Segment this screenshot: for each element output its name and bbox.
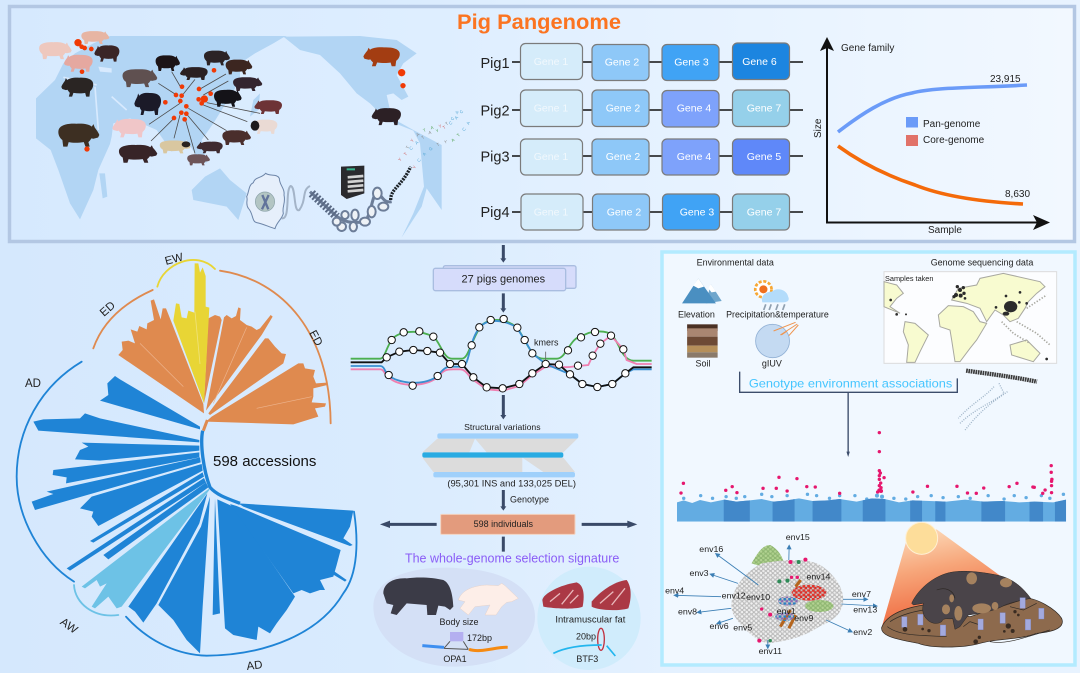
flow arrows <box>380 245 637 552</box>
heading: genotype environment associations: Genotype environment associations <box>749 377 952 391</box>
illustration: pig in mud under sun <box>882 522 1062 647</box>
tree group labels <box>25 251 324 673</box>
tree group labels: ED <box>306 329 324 348</box>
blob: body size <box>373 568 535 667</box>
row: Pig2: Gene 7 <box>747 102 781 114</box>
connector lines <box>149 72 260 153</box>
clade: EW yellow branches <box>173 263 209 403</box>
icon: chromatin fibre <box>310 167 411 231</box>
row: Pig1: Gene 1 <box>534 56 568 68</box>
row: Pig2 <box>480 90 790 127</box>
row: Pig3: Gene 2 <box>606 151 640 163</box>
chart: environment network: env13 <box>853 604 877 614</box>
chart: environment network: env14 <box>806 571 831 581</box>
icon: sun and rain cloud <box>755 281 789 310</box>
tree group labels: EW <box>164 251 185 268</box>
row: Pig3 <box>480 139 790 175</box>
row: Pig4: Gene 2 <box>607 206 641 218</box>
DNA sequence letters: Y C A G T Y A T C A C G <box>412 122 470 168</box>
chart: pan and core genome curves: Gene family <box>841 43 894 54</box>
box: 598 individuals: 598 individuals <box>474 519 534 529</box>
gene presence rows <box>480 43 803 230</box>
panel: pipeline centre <box>351 245 652 670</box>
tree group labels: AD <box>25 378 41 390</box>
row: Pig2: Gene 1 <box>534 102 568 114</box>
pangenome graph with kmers: kmers <box>534 338 559 348</box>
row: Pig2: Gene 4 <box>677 102 711 114</box>
chart: environment network: env11 <box>759 646 782 656</box>
heading: genome sequencing data: Genome sequencing data <box>931 258 1033 268</box>
world map with pig breeds <box>36 31 470 236</box>
structural variations diagram: (95,301 INS and 133,025 DEL) <box>447 479 576 489</box>
chart: environment network: env9 <box>794 613 813 623</box>
sampling location dots <box>74 39 406 152</box>
environmental data: Precipitation&temperature <box>726 310 829 320</box>
chart: environment network: env16 <box>699 544 723 554</box>
environmental data: Elevation <box>678 310 715 320</box>
row: Pig4 <box>480 194 790 230</box>
environmental data: gIUV <box>762 359 782 369</box>
chart: environment network: env5 <box>733 623 752 633</box>
clade: ED orange branches <box>118 299 327 431</box>
chart: pan and core genome curves: 8,630 <box>1005 189 1030 200</box>
icon: sequencer <box>341 166 364 199</box>
structural variations diagram <box>422 422 578 489</box>
tree centre label: 598 accessions <box>213 453 316 470</box>
environmental data: Soil <box>696 359 711 369</box>
pangenome graph with kmers <box>351 315 652 392</box>
legend: Pan-genome <box>923 119 981 130</box>
row: Pig4: Gene 3 <box>680 206 714 218</box>
DNA sequence letters <box>398 110 470 168</box>
box: 27 pigs genomes <box>433 266 576 291</box>
heading: selection signature: The whole-genome selection signature <box>405 551 619 566</box>
row: Pig1: Pig1 <box>480 56 510 72</box>
blob: intramuscular fat: BTF3 <box>576 654 598 664</box>
pig breed illustrations <box>39 31 401 165</box>
tree group labels: AD <box>246 659 263 673</box>
chart: pan and core genome curves: 23,915 <box>990 74 1021 85</box>
chart: environment network: env2 <box>853 627 872 637</box>
chart: environment network: env7 <box>852 589 871 599</box>
chart: pan and core genome curves <box>813 37 1050 236</box>
chart: environment network <box>665 532 877 656</box>
chart: environment network: env8 <box>678 607 697 617</box>
legend <box>906 117 985 146</box>
genome sequencing map: Samples taken <box>885 274 933 283</box>
blob: intramuscular fat: 20bp <box>576 631 596 641</box>
row: Pig1 <box>480 43 790 80</box>
label: Genotype: Genotype <box>510 495 549 505</box>
blob: body size: Body size <box>440 617 478 627</box>
icon: UV globe <box>756 322 798 358</box>
environmental data <box>678 258 829 369</box>
clade: AW light blue branches <box>82 488 209 608</box>
row: Pig3: Gene 1 <box>534 151 568 163</box>
chart: environment network: env4 <box>665 585 684 595</box>
blob: intramuscular fat: Intramuscular fat <box>555 614 626 624</box>
blob: body size: OPA1 <box>443 654 467 664</box>
legend: Core-genome <box>923 135 985 146</box>
chart: environment network: env1 <box>777 606 796 616</box>
row: Pig2: Gene 2 <box>606 102 640 114</box>
chart: environment network: env12 <box>722 591 746 601</box>
panel: pig pangenome top <box>8 4 1076 244</box>
arrows to env labels <box>675 546 876 648</box>
row: Pig4: Gene 7 <box>747 206 781 218</box>
row: Pig1: Gene 6 <box>742 56 777 68</box>
row: Pig3: Gene 5 <box>747 151 781 163</box>
genome sequencing map <box>884 272 1057 363</box>
row: Pig4: Gene 1 <box>534 206 568 218</box>
chart: pan and core genome curves: Sample <box>928 225 962 236</box>
icon: soil layers <box>687 324 718 358</box>
chart: environment network: env3 <box>689 568 709 578</box>
DNA sequence letters: Y T C A T A Y T C A C G <box>398 110 464 161</box>
group arcs <box>17 260 356 656</box>
row: Pig1: Gene 2 <box>605 56 639 68</box>
clade: AD blue branches <box>32 376 353 653</box>
structural variations diagram: Structural variations <box>464 422 541 432</box>
panel: genotype environment associations <box>662 252 1075 665</box>
chart: pan and core genome curves: Size <box>813 118 824 138</box>
row: Pig3: Pig3 <box>480 150 510 166</box>
title: Pig Pangenome <box>457 10 621 34</box>
chart: phylogenetic tree of 598 accessions <box>17 260 356 656</box>
blob: body size: 172bp <box>467 633 492 643</box>
row: Pig1: Gene 3 <box>674 56 709 68</box>
chart: environment network: env6 <box>709 621 729 631</box>
icon: DNA fibre <box>958 371 1037 430</box>
box: 27 pigs genomes: 27 pigs genomes <box>461 274 546 286</box>
row: Pig3: Gene 4 <box>677 151 711 163</box>
tree group labels: ED <box>98 300 118 319</box>
chart: Manhattan plot <box>677 431 1067 523</box>
blob: intramuscular fat <box>537 567 641 670</box>
tree group labels: AW <box>58 616 80 636</box>
row: Pig2: Pig2 <box>480 104 510 120</box>
box: 598 individuals <box>441 514 575 534</box>
icon: cell and nucleus <box>247 173 310 229</box>
chart: environment network: env15 <box>786 532 810 542</box>
chart: environment network: env10 <box>746 592 770 602</box>
row: Pig4: Pig4 <box>480 205 510 221</box>
icon: mountain <box>682 278 722 303</box>
bracket and arrow <box>740 372 957 457</box>
environmental data: Environmental data <box>697 258 774 268</box>
